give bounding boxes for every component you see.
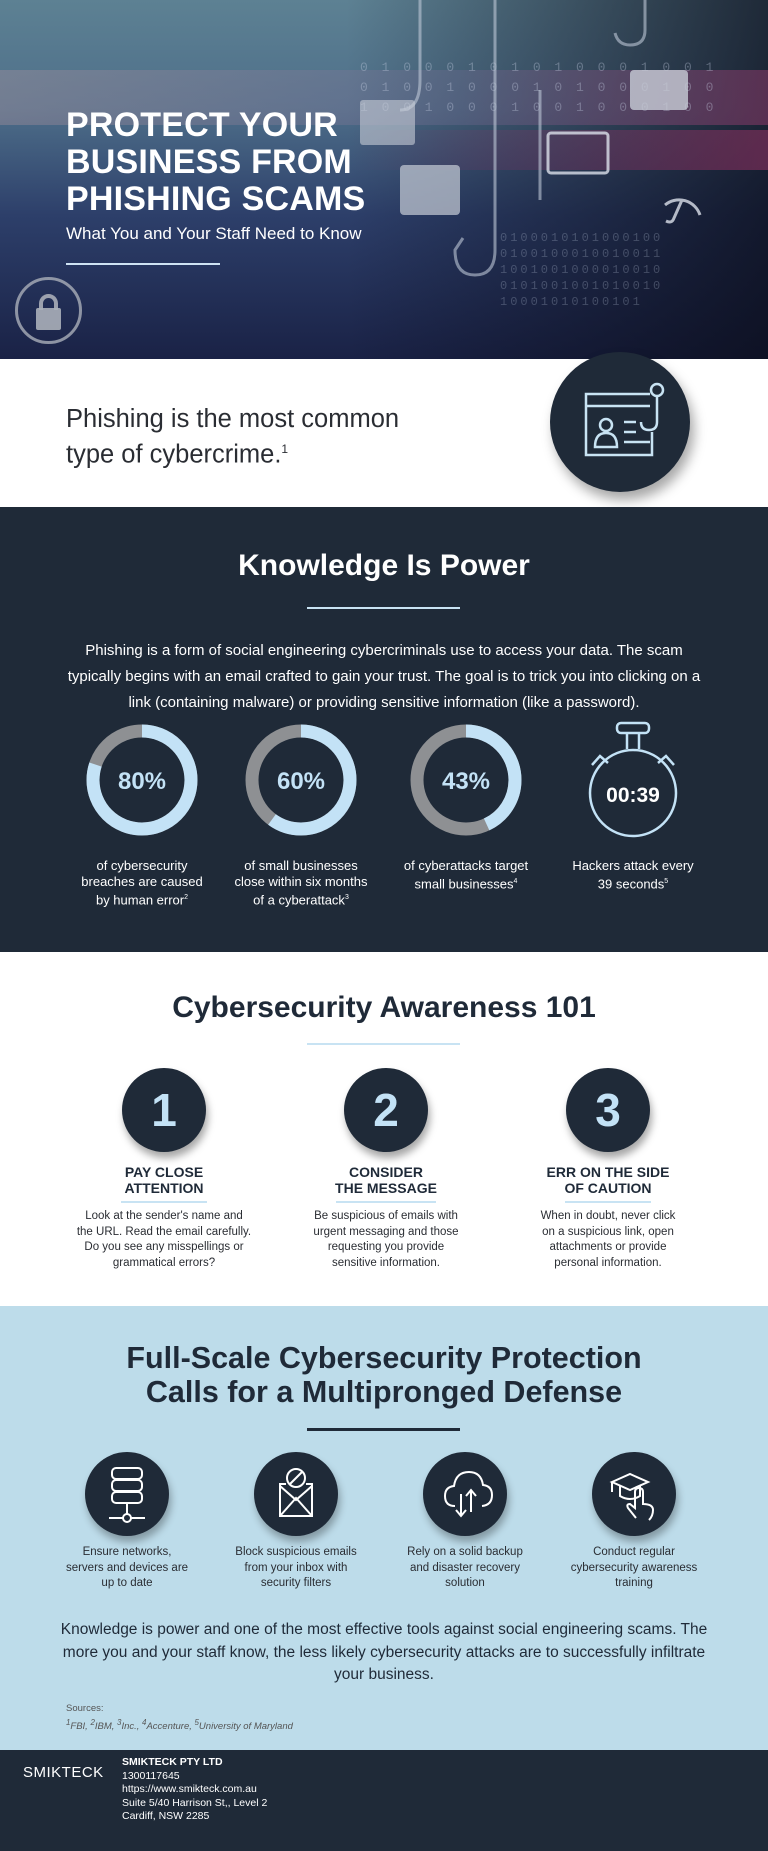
header banner: 0 1 0 0 1 0 0 0 1 0 1 0 0 0 1 0 0 (360, 80, 716, 95)
chart: donuts: Hackers attack every (572, 858, 694, 873)
title: BUSINESS FROM (66, 143, 352, 181)
step 1: Do you see any misspellings or (84, 1241, 244, 1253)
panel: multipronged defense: cybersecurity awareness (571, 1562, 697, 1574)
contact: Suite 5/40 Harrison St,, Level 2 (122, 1796, 267, 1808)
chart: donuts: 80% (118, 768, 166, 795)
chart: donuts: 39 seconds5 (598, 876, 668, 891)
icon: training (592, 1452, 676, 1536)
chart: donuts: of a cyberattack3 (253, 892, 349, 907)
heading (126, 1341, 642, 1409)
panel: awareness 101: grammatical errors? (113, 1256, 215, 1268)
header banner: 10001010100101 (500, 295, 643, 309)
chart: donuts: 00:39 (606, 784, 660, 807)
step 3 (540, 1068, 676, 1268)
header banner (0, 0, 768, 359)
chart: donuts (81, 722, 694, 907)
contact: https://www.smikteck.com.au (122, 1783, 257, 1795)
panel: multipronged defense: from your inbox with (245, 1562, 347, 1574)
chart: donuts: 43% (442, 768, 490, 795)
panel: awareness 101: personal information. (554, 1256, 662, 1268)
panel: multipronged defense: Rely on a solid backup (407, 1546, 523, 1558)
panel: multipronged defense: Conduct regular (593, 1546, 675, 1558)
chart: donuts: 60% (277, 768, 325, 795)
panel: multipronged defense: security filters (261, 1577, 331, 1589)
header banner: 0100010101000100 (500, 231, 663, 245)
step 2: 2 (373, 1084, 399, 1136)
step 2: urgent messaging and those (313, 1226, 459, 1238)
step 1: ATTENTION (124, 1180, 204, 1196)
title: PHISHING SCAMS (66, 180, 365, 218)
chart: donuts: of cybersecurity (96, 858, 188, 873)
captions: Ensure networks, (83, 1546, 171, 1558)
contact: 1300117645 (122, 1770, 180, 1782)
subtitle: What You and Your Staff Need to Know (66, 224, 362, 243)
captions (66, 1546, 188, 1589)
panel: knowledge is power (0, 507, 768, 952)
header banner: 0101001001010010 (500, 279, 663, 293)
step 2: requesting you provide (328, 1241, 444, 1253)
step 3: ERR ON THE SIDE (547, 1164, 669, 1180)
icon: cloud backup (423, 1452, 507, 1536)
title (66, 106, 365, 218)
heading: Full-Scale Cybersecurity Protection (126, 1341, 642, 1375)
step 3: 3 (595, 1084, 621, 1136)
title: PROTECT YOUR (66, 106, 338, 144)
chart: donuts: small businesses4 (415, 876, 517, 891)
step 1 (77, 1068, 251, 1268)
icon: server (85, 1452, 169, 1536)
chart: donuts: close within six months (235, 874, 367, 889)
step 1: Look at the sender's name and (85, 1210, 243, 1222)
sources: 1FBI, 2IBM, 3Inc., 4Accenture, 5University of Maryland (66, 1718, 293, 1732)
header banner: 0 1 0 0 0 1 0 1 0 1 0 0 0 1 0 0 1 (360, 60, 716, 75)
step 3: attachments or provide (550, 1241, 666, 1253)
header banner: 0100100010010011 (500, 247, 663, 261)
step 2: CONSIDER (349, 1164, 423, 1180)
icon: stopwatch (590, 723, 676, 836)
panel: multipronged defense: solution (445, 1577, 485, 1589)
closing text: Knowledge is power and one of the most effective tools against social engineering scams. The more you and your staff know, the less likely cybersecurity attacks are to successfully infiltrate your business. (61, 1621, 707, 1683)
step 2 (313, 1068, 459, 1268)
panel: multipronged defense (0, 1306, 768, 1750)
contact (122, 1756, 267, 1822)
intro statement: Phishing is the most common (66, 405, 399, 433)
heading: Knowledge Is Power (238, 549, 530, 582)
step 1: 1 (151, 1084, 177, 1136)
step 2: THE MESSAGE (335, 1180, 437, 1196)
chart: donuts: breaches are caused (81, 874, 203, 889)
panel: multipronged defense: and disaster recovery (410, 1562, 520, 1574)
header banner: 1 0 0 1 0 0 0 1 0 0 1 0 0 0 1 0 0 (360, 100, 716, 115)
panel: multipronged defense: Block suspicious emails (235, 1546, 357, 1558)
heading: Calls for a Multipronged Defense (146, 1375, 622, 1409)
panel: multipronged defense: training (615, 1577, 653, 1589)
step 3: on a suspicious link, open (542, 1226, 674, 1238)
step 3: When in doubt, never click (541, 1210, 675, 1222)
panel: awareness 101 (0, 952, 768, 1306)
step 2: Be suspicious of emails with (314, 1210, 458, 1222)
captions: servers and devices are (66, 1562, 188, 1574)
text block: Phishing is a form of social engineering cybercriminals use to access your data. The scam typically begins with an email crafted to gain your trust. The goal is to trick you into clicking on a link (containing malware) or providing sensitive information (like a password). (68, 642, 700, 711)
chart: donuts: of cyberattacks target (404, 858, 528, 873)
icon: phishing browser (550, 352, 690, 492)
sources: Sources: (66, 1703, 104, 1714)
sources (66, 1703, 294, 1732)
step 1: PAY CLOSE (125, 1164, 203, 1180)
step 3: OF CAUTION (564, 1180, 652, 1196)
step 1: the URL. Read the email carefully. (77, 1226, 251, 1238)
captions: up to date (101, 1577, 153, 1589)
logo: SMIKTECK (23, 1764, 104, 1781)
icon: lock (15, 277, 82, 344)
chart: donuts: by human error2 (96, 892, 188, 907)
intro statement: type of cybercrime.1 (66, 440, 288, 468)
panel: awareness 101: sensitive information. (332, 1256, 440, 1268)
heading: Cybersecurity Awareness 101 (172, 991, 596, 1024)
intro statement (66, 405, 399, 468)
footer (0, 1750, 768, 1851)
icon: blocked email (254, 1452, 338, 1536)
header banner: 1001001000010010 (500, 263, 663, 277)
contact: Cardiff, NSW 2285 (122, 1810, 209, 1822)
chart: donuts: of small businesses (244, 858, 358, 873)
contact: SMIKTECK PTY LTD (122, 1756, 223, 1768)
